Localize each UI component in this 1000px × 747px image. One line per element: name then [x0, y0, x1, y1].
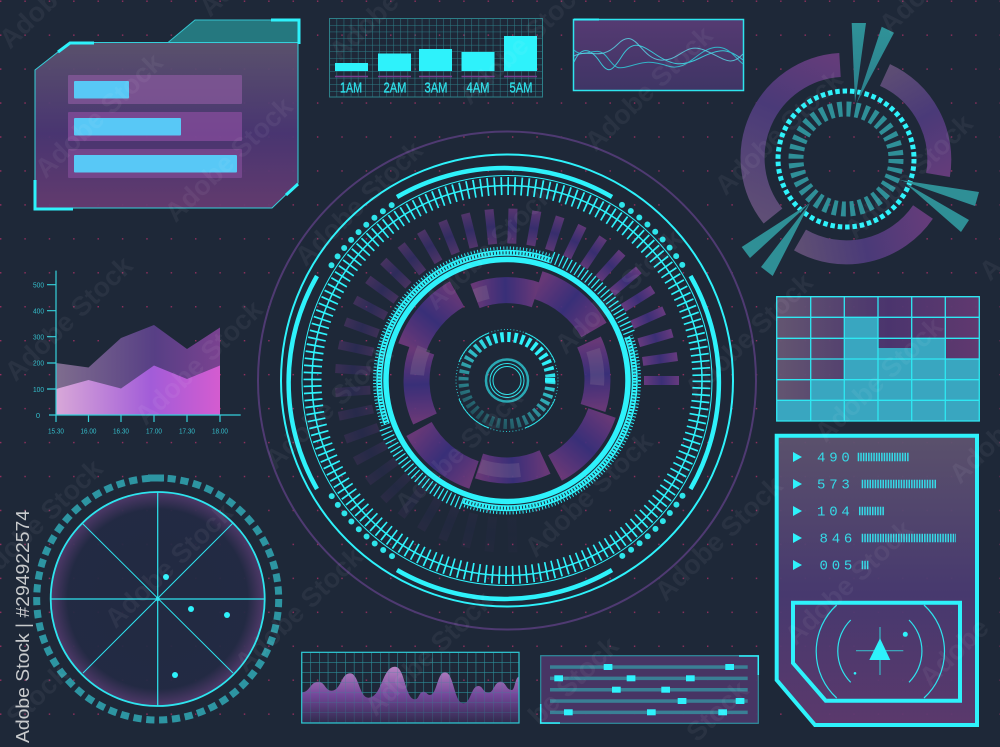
chart: radar [37, 474, 279, 720]
readout rows [793, 450, 956, 574]
central tick dial [456, 330, 558, 432]
watermark: Adobe Stock tiles: Adobe Stock [129, 294, 269, 431]
readout rows: 005 [820, 558, 856, 574]
radial purple bars [335, 208, 679, 553]
chart: stacked area: 100 [33, 385, 44, 394]
bar chart: 1AM to 5AM: 1AM [340, 80, 362, 96]
bar chart: 1AM to 5AM: 4AM [466, 80, 490, 96]
chart: stacked area: 500 [33, 280, 44, 290]
watermark: Adobe Stock tiles: Adobe Stock [389, 382, 529, 519]
bar chart: 1AM to 5AM [330, 18, 542, 97]
watermark: Adobe Stock tiles: Adobe [913, 612, 995, 692]
watermark: Adobe Stock tiles: Adobe Stock [99, 497, 239, 634]
chart: stacked area: 17.30 [179, 426, 195, 436]
bar chart: 1AM to 5AM: 5AM [510, 80, 532, 96]
readout rows: 104 [817, 504, 854, 520]
chart: stacked area: 300 [33, 332, 44, 342]
chart: stacked area: 15.30 [48, 426, 64, 436]
watermark: Adobe Stock tiles: Adobe Stock [0, 250, 139, 387]
chart: wave area with grid [302, 652, 519, 723]
watermark: Adobe Stock tiles: Adobe Stock [649, 470, 789, 607]
panel: heat table [777, 297, 979, 421]
chart: stacked area: 16.00 [80, 426, 96, 436]
chart: circular gauge with spikes [742, 23, 979, 276]
readout rows: 490 [817, 450, 854, 466]
watermark: Adobe Stock tiles: Adobe Stock [549, 223, 689, 360]
chart: stacked area: 18.00 [212, 426, 228, 436]
panel: folder with progress bars [35, 20, 299, 209]
cyan outer ring [281, 154, 733, 606]
watermark: Adobe Stock tiles: Stock [0, 658, 75, 731]
watermark: Adobe Stock tiles: Adobe Stock [159, 91, 299, 228]
readout rows: 846 [820, 532, 856, 548]
readout rows: 573 [817, 478, 854, 494]
stock id text: Adobe Stock | #294922574 [12, 510, 33, 743]
outer purple ring [258, 132, 756, 630]
four dotted corner arcs [332, 205, 682, 556]
bar chart: 1AM to 5AM: 2AM [384, 80, 406, 96]
watermark: Adobe Stock tiles: Adobe Stock [779, 514, 919, 651]
panel: waveform [574, 20, 744, 90]
thick inner ring with ladder and ticks [374, 248, 640, 513]
watermark: Adobe Stock tiles: Adobe Stock [839, 108, 979, 245]
watermark: Adobe Stock tiles: Adobe Stock [709, 64, 849, 201]
chart: stacked area: 400 [33, 306, 44, 316]
watermark: Adobe Stock tiles: Adobe Stock [259, 338, 399, 475]
chart: stacked area: 0 [36, 411, 40, 420]
watermark: Adobe Stock tiles: Adobe Stock [29, 47, 169, 184]
chart: stacked area: 200 [33, 358, 44, 368]
chart: stacked area: 16.30 [113, 426, 129, 436]
panel: sliders [541, 656, 758, 723]
chart: central radial dial [258, 132, 756, 630]
chart: stacked area: 17.00 [146, 426, 162, 436]
watermark: Adobe Stock tiles: be Stock [522, 630, 625, 730]
bar chart: 1AM to 5AM: 3AM [424, 80, 448, 96]
watermark: Adobe Stock tiles: Adobe Stock [579, 20, 719, 157]
watermark: Adobe Stock tiles: Stock [680, 674, 755, 747]
watermark: Adobe Stock tiles: Adobe Stock [679, 267, 819, 404]
watermark: Adobe Stock tiles: Adobe Stock [289, 135, 429, 272]
four thick arcs [289, 168, 719, 599]
thin ring and tick ring [302, 176, 712, 586]
watermark: Adobe Stock tiles: Adobe Stock [229, 541, 369, 678]
watermark: Adobe Stock tiles: Adobe Stock [519, 426, 659, 563]
watermark: Adobe Stock tiles: Adobe Stock [419, 179, 559, 316]
targeting panel [793, 603, 960, 701]
chart: stacked area [33, 271, 241, 436]
inner gradient arc segments [412, 285, 602, 475]
panel: readouts and targeting [777, 436, 977, 725]
watermark: Adobe Stock tiles: Adobe Stock [809, 311, 949, 448]
watermark: Adobe Stock tiles: Adobe Stock [359, 585, 499, 722]
